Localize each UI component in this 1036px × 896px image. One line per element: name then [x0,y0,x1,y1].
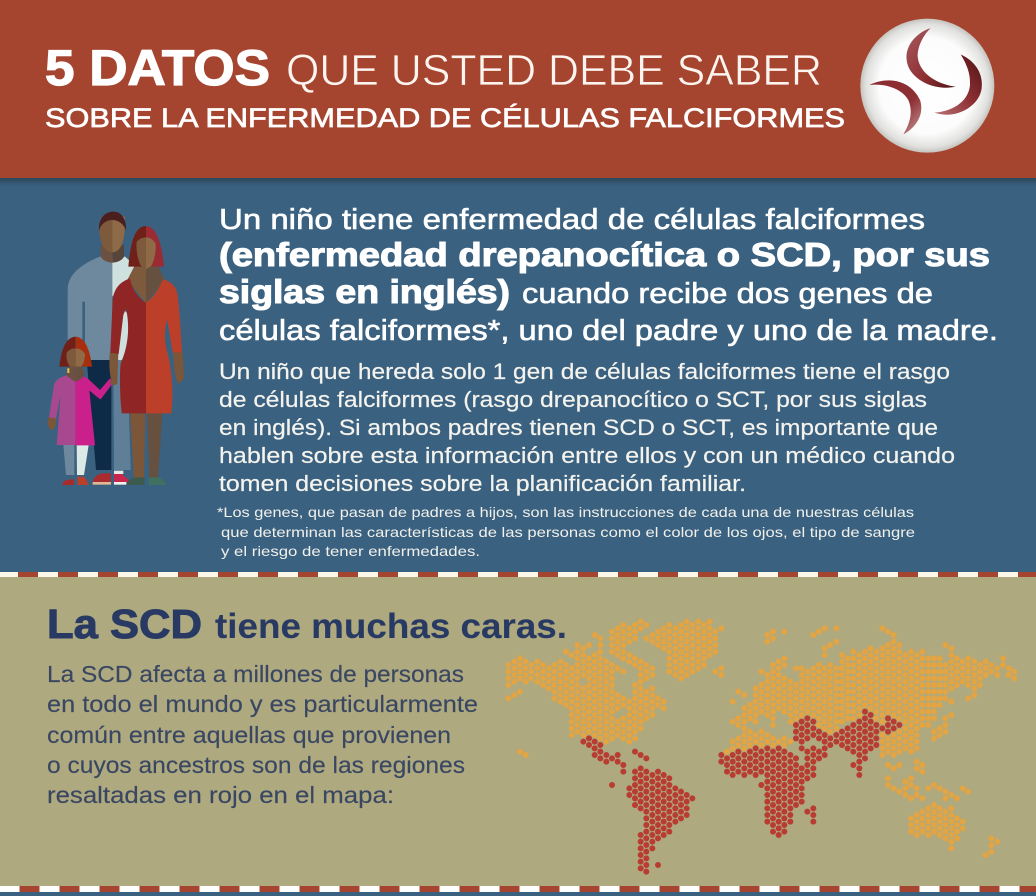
child [47,337,117,485]
text block: world paragraph: resaltadas en rojo en el mapa: [47,782,394,808]
text block: world paragraph: común entre aquellas que provienen [47,722,451,748]
text block: trait paragraph: Un niño que hereda solo 1 gen de células falciformes tiene el rasgo [219,359,950,384]
man [68,212,139,485]
dashed stripe: top [0,572,1036,577]
text block: footnote: y el riesgo de tener enfermedades. [221,543,480,559]
panel: blue background [0,178,1036,574]
panel: header [0,0,1036,178]
title: 5 datos: 5 DATOS [45,40,270,96]
text block: main statement: siglas en inglés) [219,273,510,310]
chart: dotted world map [508,622,1014,872]
subtitle: SOBRE LA ENFERMEDAD DE CÉLULAS FALCIFORMES [45,103,845,133]
panel: olive background [0,574,1036,896]
text block: world paragraph: La SCD afecta a millones de personas [47,661,464,687]
text block: trait paragraph: tomen decisiones sobre la planificación familiar. [219,471,746,496]
text block: main statement: Un niño tiene enfermedad de células falciformes [219,204,925,236]
text block: footnote: *Los genes, que pasan de padres a hijos, son las instrucciones de cada una de nuestras células [217,504,914,520]
text block: world paragraph: en todo el mundo y es particularmente [47,691,478,717]
text block: trait paragraph: de células falciformes (rasgo drepanocítico o SCT, por sus siglas [219,387,927,412]
text block: footnote [217,504,915,559]
text block: trait paragraph: en inglés). Si ambos padres tienen SCD o SCT, es importante que [219,415,938,440]
title: que usted debe saber: QUE USTED DEBE SABER [286,46,822,95]
dashed stripe: bottom [0,886,1036,896]
icon: family illustration [47,212,184,485]
text block: main statement: células falciformes*, uno del padre y uno de la madre. [219,315,998,347]
text block: world paragraph [47,661,478,808]
text block: trait paragraph [219,359,955,496]
text block: world paragraph: o cuyos ancestros son de las regiones [47,752,465,778]
heading: la SCD tiene muchas caras: La SCD [47,601,202,647]
text block: footnote: que determinan las características de las personas como el color de los ojos, el tipo de sangre [221,524,915,540]
heading: la SCD tiene muchas caras [47,601,567,647]
text block: main statement: (enfermedad drepanocítica o SCD, por sus [219,236,990,273]
map: orange regions [508,622,1014,855]
map: red regions [583,712,899,872]
heading: la SCD tiene muchas caras: tiene muchas caras. [215,607,567,646]
woman [109,226,184,485]
text block: trait paragraph: hablen sobre esta información entre ellos y con un médico cuando [219,443,955,468]
text block: main statement [219,204,998,347]
text block: main statement: cuando recibe dos genes de [522,278,933,310]
icon: sickle cells disc [860,19,994,153]
